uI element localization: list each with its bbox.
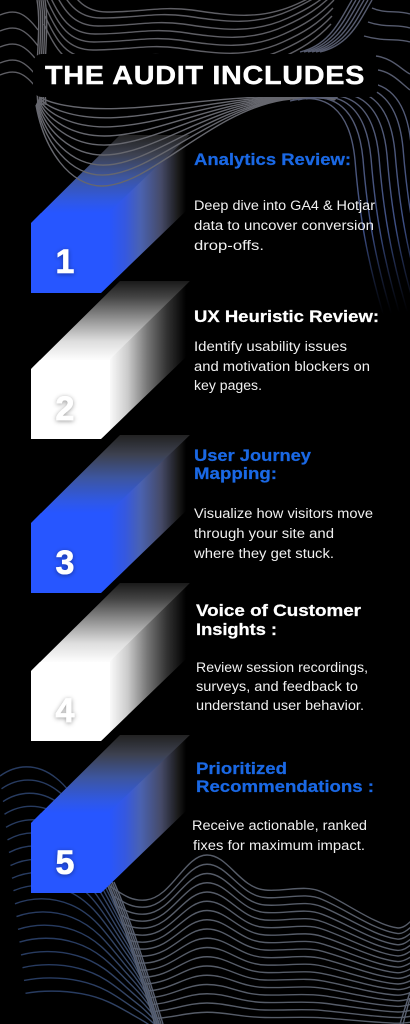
heading [194,446,312,483]
block 1 [31,135,190,293]
heading: Prioritized [196,759,287,778]
number 1: 1 [56,243,74,281]
heading [196,759,374,796]
block 4 [31,583,190,741]
item 4: voice of customer insights [196,601,368,713]
heading [196,601,361,639]
title [33,54,378,97]
description [192,818,367,853]
heading: Insights : [196,620,277,639]
description: Receive actionable, ranked [192,818,367,833]
heading: Recommendations : [196,777,374,796]
top wave lines [0,0,410,330]
block 3 [31,435,190,593]
description: surveys, and feedback to [196,679,358,694]
heading: Analytics Review: [194,150,351,169]
bottom wave lines [0,767,410,1024]
item 2: ux heuristic review [194,307,379,393]
item 5: prioritized recommendations [192,759,374,853]
description: Deep dive into GA4 & Hotjar [194,198,376,213]
description: drop-offs. [194,238,264,253]
number 3: 3 [56,544,74,582]
block 2 [31,281,190,439]
description: Identify usability issues [194,339,347,354]
description [194,339,370,393]
item 1: analytics review [194,150,376,253]
heading: UX Heuristic Review: [194,307,379,326]
number 4: 4 [56,692,75,730]
description: where they get stuck. [193,546,334,561]
heading: Voice of Customer [196,601,361,620]
description: data to uncover conversion [194,218,374,233]
description: fixes for maximum impact. [193,838,365,853]
title: THE AUDIT INCLUDES [45,60,365,90]
description: Review session recordings, [196,660,368,675]
number 2: 2 [56,390,74,428]
heading: Mapping: [194,464,277,483]
heading: User Journey [194,446,312,465]
block 5 [31,735,190,893]
item 3: user journey mapping [193,446,373,561]
description [194,198,376,253]
description [193,506,373,561]
description: key pages. [194,378,262,393]
description: through your site and [194,526,334,541]
description: Visualize how visitors move [194,506,373,521]
description: and motivation blockers on [194,359,370,374]
number 5: 5 [56,844,74,882]
description: understand user behavior. [196,698,364,713]
description [196,660,368,713]
